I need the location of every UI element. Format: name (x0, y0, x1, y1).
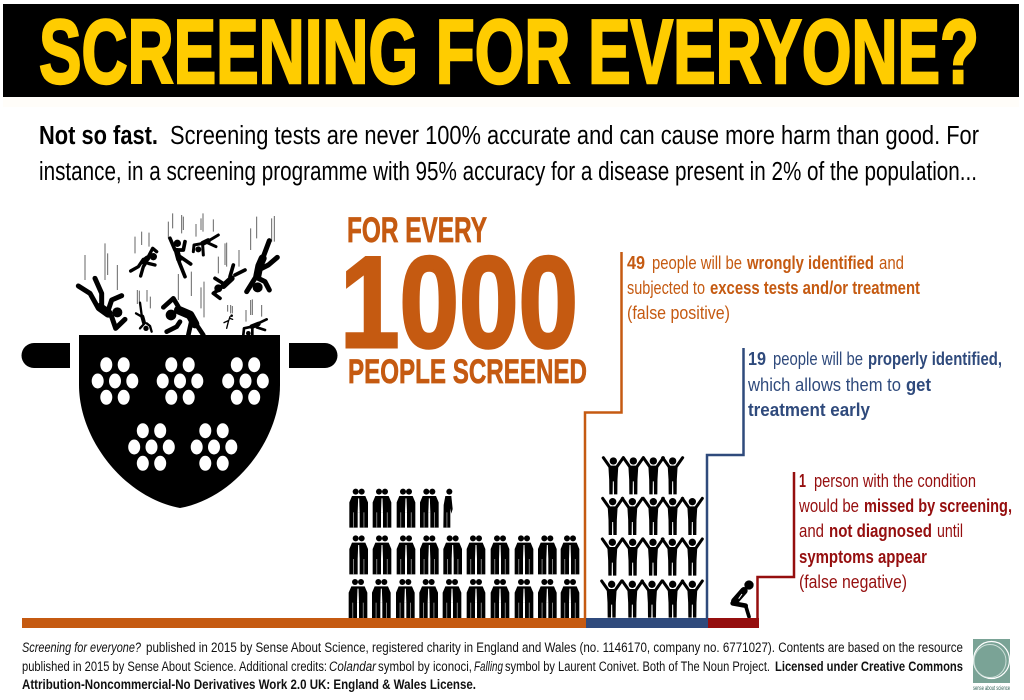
title banner (3, 2, 1019, 107)
footer credits: Attribution-Noncommercial-No Derivatives Work 2.0 UK: England & Wales License. (22, 677, 476, 692)
callout: true positives: people will be (773, 348, 863, 369)
callout: false negative: (false negative) (799, 571, 907, 592)
falling figure 1 (78, 278, 125, 328)
callout: false positives: excess tests and/or treatment (710, 277, 920, 298)
footer credits: Licensed under Creative Commons (775, 659, 963, 674)
callout: false positives: (false positive) (627, 302, 730, 323)
footer credits: symbol by Laurent Conivet. Both of The Noun Project. (505, 659, 770, 674)
falling figure 2 (131, 248, 157, 276)
falling figure 10 (243, 319, 267, 336)
falling figure 8 (163, 298, 203, 335)
callout: false positives: wrongly identified (746, 252, 874, 273)
connector line red (758, 472, 794, 618)
callout: false negative: not diagnosed (829, 520, 932, 541)
callout: false negative (758, 470, 1012, 618)
colander holes (92, 357, 269, 471)
colander bowl (79, 335, 280, 508)
callout: false negative: symptoms appear (799, 546, 927, 567)
callout: false positives: and (879, 252, 904, 273)
1000: 1000 (340, 229, 578, 375)
callout: false positives: subjected to (627, 277, 705, 298)
falling figure 3 (170, 238, 191, 277)
callout: false negative: would be (798, 495, 859, 516)
people screened: PEOPLE SCREENED (348, 353, 587, 391)
callout: false positives (585, 252, 920, 618)
logo: sense about science (973, 639, 1010, 692)
footer credits: symbol by iconoci, (378, 659, 472, 674)
motion lines (85, 213, 274, 322)
callout: false negative: person with the condition (814, 470, 976, 491)
pictogram: 1 missed person sitting (733, 580, 754, 617)
footer credits (22, 640, 963, 692)
intro text (39, 122, 979, 186)
footer credits: Screening for everyone? (22, 640, 141, 655)
falling figure 4 (193, 235, 218, 255)
icon: colander with falling people (22, 213, 338, 508)
footer credits: Falling (474, 659, 503, 674)
falling figure 6 (247, 241, 277, 292)
callout: false negative: 1 (799, 470, 806, 491)
callout: true positives: 19 (748, 348, 766, 369)
headline: for every 1000 people screened (340, 210, 587, 391)
callout: false positives: 49 (627, 252, 645, 273)
footer credits: published in 2015 by Sense About Science. Additional credits: (22, 659, 327, 674)
falling people (78, 213, 277, 336)
falling figure 7 (136, 303, 152, 332)
callout: false negative: and (799, 520, 824, 541)
callout: true positives: which allows them to (747, 374, 901, 395)
connector line blue (707, 348, 744, 618)
intro text: Not so fast. (39, 122, 158, 150)
for every: FOR EVERY (347, 210, 487, 250)
falling figure 5 (213, 265, 245, 298)
callout: false negative: until (937, 520, 963, 541)
callout: true positives (707, 348, 1002, 618)
falling figure 9 (224, 314, 233, 328)
base bar (22, 618, 759, 628)
footer credits: Colandar (329, 659, 376, 674)
connector line orange (585, 252, 622, 618)
pictogram: 19 properly identified people (602, 457, 702, 618)
callout: false positives: people will be (652, 252, 742, 273)
callout: true positives: get (906, 374, 931, 395)
pictogram: 49 wrongly identified people (349, 489, 579, 618)
callout: true positives: treatment early (748, 399, 871, 420)
colander handles (22, 343, 338, 368)
